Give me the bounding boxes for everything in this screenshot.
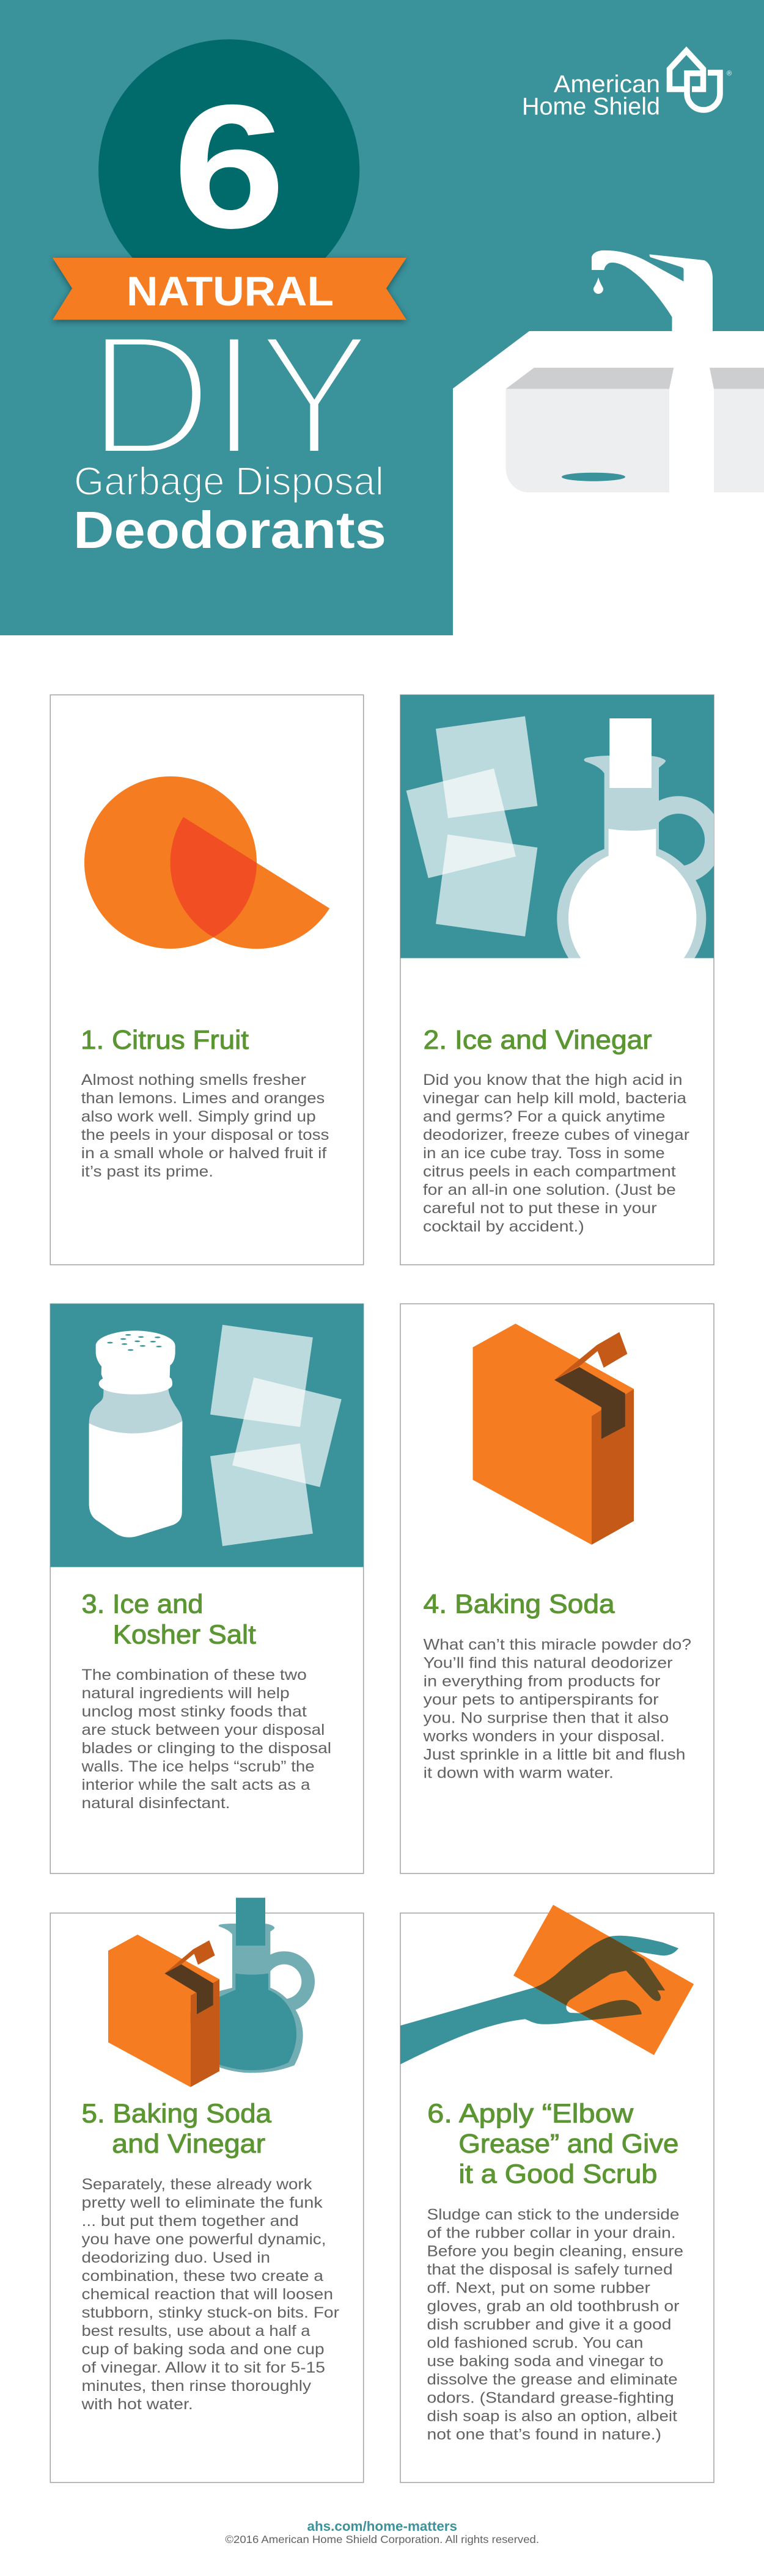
body text: Sludge can stick to the underside	[427, 2206, 680, 2223]
panel: citrus fruit	[50, 695, 364, 1264]
body text: blades or clinging to the disposal	[82, 1740, 331, 1757]
body text: also work well. Simply grind up	[81, 1108, 316, 1125]
panel: baking soda	[400, 1304, 714, 1874]
illustration: baking soda box and vinegar bottle	[108, 1898, 315, 2087]
illustration: salt shaker and ice cubes	[50, 1304, 364, 1567]
header banner	[0, 0, 764, 635]
dark circle behind number	[98, 39, 359, 301]
body text: are stuck between your disposal	[82, 1721, 325, 1739]
body text: that the disposal is safely turned	[427, 2261, 673, 2278]
body text: ... but put them together and	[82, 2213, 299, 2230]
subtitle: garbage disposal: Garbage Disposal	[74, 459, 384, 503]
water drop	[593, 277, 603, 294]
body text: you have one powerful dynamic,	[82, 2231, 326, 2248]
body text: cocktail by accident.)	[423, 1218, 584, 1235]
body text: your pets to antiperspirants for	[424, 1691, 659, 1709]
body text: Separately, these already work	[82, 2176, 312, 2193]
body text	[423, 1071, 689, 1235]
sink counter	[453, 331, 764, 635]
ribbon	[53, 258, 406, 320]
icon: baking soda box	[473, 1324, 634, 1545]
illustration: ice cubes and vinegar bottle	[400, 695, 714, 958]
body text: and germs? For a quick anytime	[423, 1108, 665, 1125]
icon: citrus fruit	[84, 776, 329, 949]
panel: elbow grease	[400, 1905, 714, 2483]
body text: pretty well to eliminate the funk	[82, 2194, 323, 2211]
heading: 4. Baking Soda	[424, 1589, 615, 1619]
body text: The combination of these two	[82, 1666, 307, 1684]
illustration: hand scrubbing with sponge	[400, 1905, 694, 2064]
title: DIY: DIY	[87, 298, 372, 492]
body text: gloves, grab an old toothbrush or	[427, 2297, 680, 2315]
heading: 5. Baking Soda	[82, 2099, 272, 2128]
body text: careful not to put these in your	[423, 1200, 657, 1217]
body text: old fashioned scrub. You can	[427, 2334, 643, 2351]
heading: Kosher Salt	[113, 1620, 256, 1650]
body text: You’ll find this natural deodorizer	[424, 1655, 673, 1672]
body text: the peels in your disposal or toss	[81, 1126, 329, 1144]
body text: walls. The ice helps “scrub” the	[81, 1758, 315, 1775]
heading: Grease” and Give	[458, 2129, 678, 2159]
logo: American Home Shield: American	[554, 71, 660, 98]
body text	[423, 1636, 691, 1782]
heading	[82, 2099, 272, 2159]
body text: Just sprinkle in a little bit and flush	[424, 1746, 686, 1764]
body text: What can’t this miracle powder do?	[424, 1636, 691, 1654]
footer	[225, 2519, 539, 2545]
body text: it down with warm water.	[424, 1765, 614, 1782]
footer url: ahs.com/home-matters	[307, 2519, 457, 2534]
body text: natural disinfectant.	[82, 1795, 230, 1812]
body text: citrus peels in each compartment	[423, 1163, 676, 1180]
panel: ice and vinegar	[400, 695, 722, 1264]
body text: it’s past its prime.	[81, 1163, 213, 1180]
ribbon label: natural: NATURAL	[127, 268, 334, 315]
logo: American Home Shield	[522, 51, 732, 120]
subtitle: deodorants: Deodorants	[73, 502, 386, 560]
panel: ice and kosher salt	[50, 1304, 364, 1874]
body text: Almost nothing smells fresher	[81, 1071, 306, 1089]
body text: than lemons. Limes and oranges	[81, 1090, 325, 1107]
heading: and Vinegar	[112, 2129, 265, 2159]
heading	[427, 2099, 678, 2189]
body text: odors. (Standard grease-fighting	[427, 2389, 674, 2406]
heading: it a Good Scrub	[458, 2159, 657, 2189]
body text: use baking soda and vinegar to	[427, 2352, 664, 2370]
heading: 1. Citrus Fruit	[81, 1025, 249, 1055]
body text: chemical reaction that will loosen	[82, 2286, 333, 2303]
body text: in an ice cube tray. Toss in some	[423, 1145, 665, 1162]
logo: American Home Shield: Home Shield	[522, 93, 660, 120]
faucet	[592, 250, 713, 333]
body text: off. Next, put on some rubber	[427, 2279, 650, 2296]
body text: unclog most stinky foods that	[82, 1703, 307, 1720]
body text: deodorizing duo. Used in	[82, 2249, 270, 2266]
body text: with hot water.	[81, 2396, 193, 2413]
body text: vinegar can help kill mold, bacteria	[423, 1090, 686, 1107]
body text: works wonders in your disposal.	[423, 1728, 665, 1745]
body text: natural ingredients will help	[82, 1685, 290, 1702]
body text: interior while the salt acts as a	[82, 1776, 310, 1793]
body text: Did you know that the high acid in	[423, 1071, 682, 1089]
body text: for an all-in one solution. (Just be	[423, 1181, 676, 1199]
body text	[81, 2176, 339, 2413]
body text: not one that’s found in nature.)	[427, 2426, 661, 2443]
body text: you. No surprise then that it also	[424, 1710, 669, 1727]
number six: 6	[173, 68, 285, 265]
body text: combination, these two create a	[82, 2268, 323, 2285]
body text: dish scrubber and give it a good	[427, 2316, 671, 2333]
heading	[82, 1589, 256, 1650]
body text	[81, 1666, 331, 1812]
body text: stubborn, stinky stuck-on bits. For	[82, 2304, 339, 2321]
heading: 3. Ice and	[82, 1589, 203, 1619]
panel: baking soda and vinegar	[50, 1898, 364, 2483]
logo: American Home Shield: ®	[727, 70, 732, 77]
body text: best results, use about a half a	[82, 2322, 310, 2340]
body text	[81, 1071, 329, 1180]
body text: of vinegar. Allow it to sit for 5-15	[82, 2359, 325, 2376]
body text: dissolve the grease and eliminate	[427, 2371, 678, 2388]
body text: of the rubber collar in your drain.	[427, 2224, 676, 2241]
body text	[427, 2206, 683, 2443]
body text: Before you begin cleaning, ensure	[427, 2242, 683, 2260]
heading: 2. Ice and Vinegar	[424, 1025, 652, 1055]
heading: 6. Apply “Elbow	[427, 2099, 633, 2128]
body text: dish soap is also an option, albeit	[427, 2407, 677, 2425]
body text: in a small whole or halved fruit if	[81, 1145, 326, 1162]
body text: deodorizer, freeze cubes of vinegar	[423, 1126, 689, 1144]
copyright: ©2016 American Home Shield Corporation. All rights reserved.	[225, 2533, 539, 2545]
body text: minutes, then rinse thoroughly	[82, 2377, 312, 2395]
body text: cup of baking soda and one cup	[82, 2341, 325, 2358]
body text: in everything from products for	[424, 1673, 660, 1690]
